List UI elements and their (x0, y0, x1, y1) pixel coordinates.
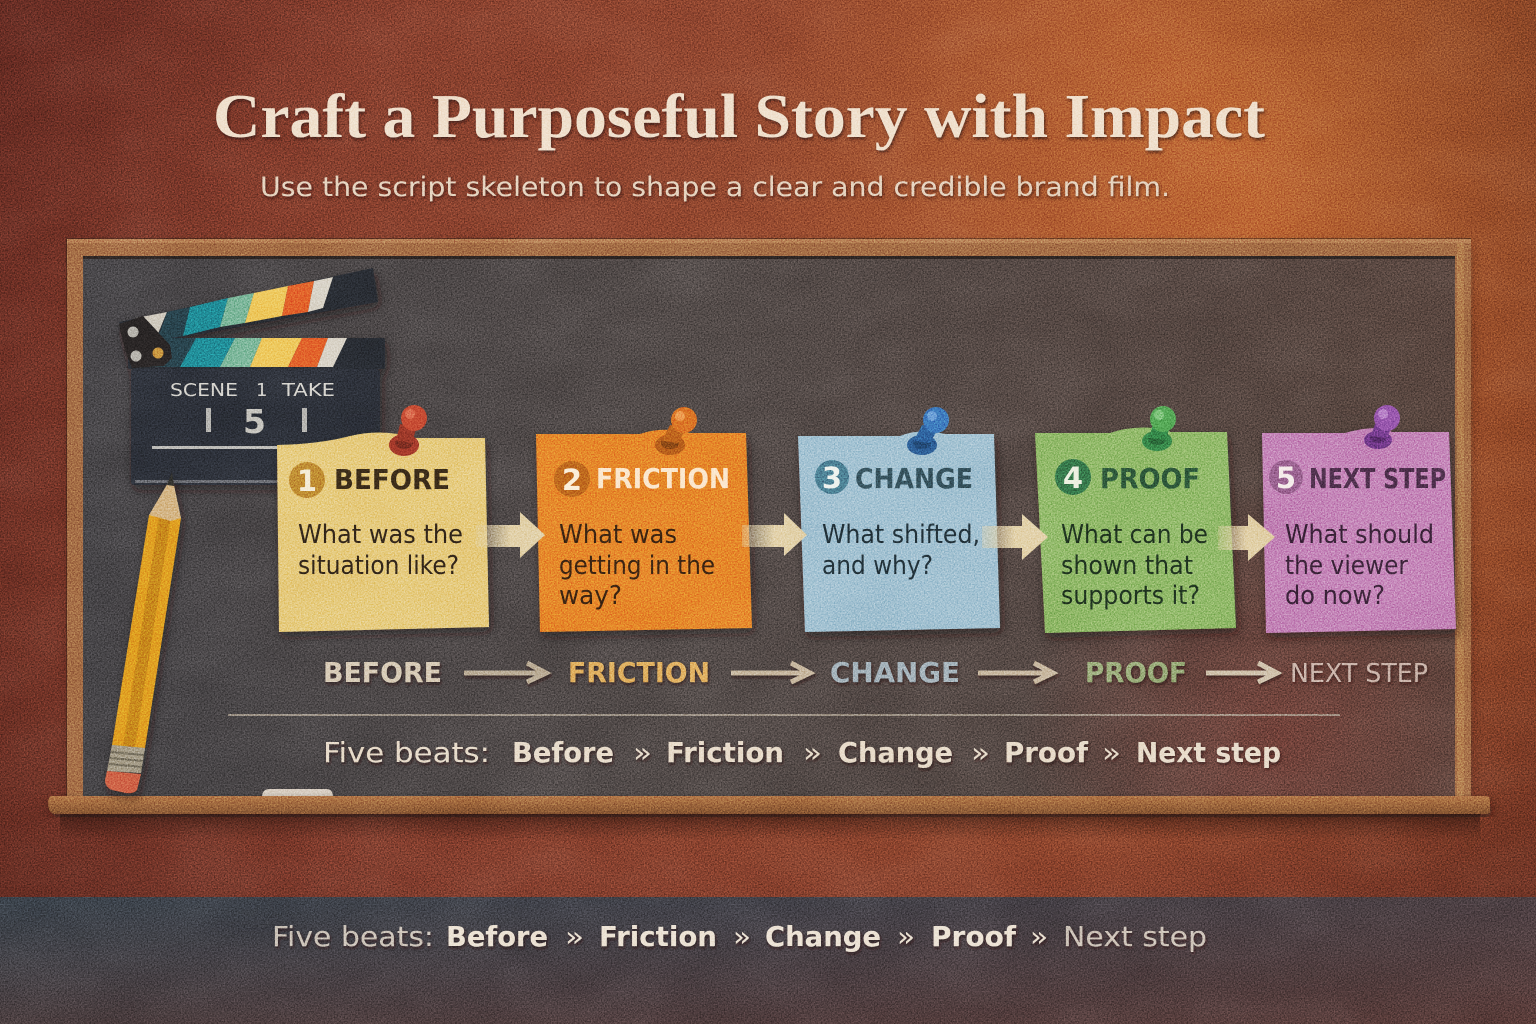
five beats line on board: Next step (1136, 736, 1281, 769)
badge 3: 3 (822, 461, 842, 495)
five beats line on board: » (1102, 736, 1121, 769)
clapper hinge (119, 316, 172, 368)
sticky note 2: friction (536, 407, 752, 632)
five beats line on board: Friction (666, 736, 784, 769)
clapperboard (119, 268, 385, 485)
flow arrow 3 (978, 663, 1053, 682)
label: proof: PROOF (1085, 656, 1187, 689)
footer five beats line: » (565, 920, 584, 953)
sticky note 5: next step (1262, 405, 1456, 633)
question 5 (1285, 520, 1434, 611)
footer five beats line: » (897, 920, 915, 953)
arrow: before to friction (476, 512, 545, 558)
badge 1 (289, 462, 325, 498)
beat labels row (323, 656, 1428, 689)
badge 5 (1269, 460, 1303, 495)
title: Craft a Purposeful Story with Impact (213, 83, 1265, 151)
sticky note 1: before (277, 405, 489, 632)
chalk ledge (48, 796, 1490, 814)
badge 2 (554, 461, 590, 497)
badge 1: 1 (297, 464, 317, 498)
question 4: supports it? (1061, 581, 1200, 611)
sticky note 4: proof (1035, 406, 1236, 633)
flow arrow 2 (731, 663, 810, 682)
question 2: way? (559, 581, 622, 611)
footer five beats line: » (1030, 920, 1048, 953)
clapper body (131, 369, 380, 485)
badge 4: 4 (1063, 461, 1083, 495)
footer five beats line: Before (446, 920, 548, 953)
badge 5: 5 (1276, 461, 1296, 495)
sticky note 3: change (798, 407, 1000, 632)
clapper top arm (119, 268, 378, 345)
arrow: friction to change (742, 513, 807, 556)
chalkboard (48, 238, 1490, 814)
clapper labels: SCENE (170, 380, 238, 401)
clapper lower arm (128, 338, 385, 369)
footer five beats line: Five beats: (272, 920, 434, 953)
chalk piece (262, 789, 333, 797)
question 3: What shifted, (822, 520, 980, 550)
arrow: proof to next step (1218, 514, 1275, 561)
clapper labels: 1 (256, 380, 267, 401)
footer five beats line: Proof (931, 920, 1017, 953)
five beats line on board: Five beats: (323, 736, 490, 769)
heading: next step: NEXT STEP (1309, 462, 1446, 495)
five beats line on board: » (633, 736, 652, 769)
flow arrow 1 (464, 663, 546, 682)
pin: green (1142, 406, 1176, 451)
label: friction: FRICTION (568, 656, 710, 689)
question 4: What can be (1061, 520, 1208, 550)
clapper labels: TAKE (281, 380, 335, 401)
footer five beats line: Change (765, 920, 881, 953)
pin: blue (907, 407, 949, 455)
subtitle: Use the script skeleton to shape a clear and credible brand film. (260, 172, 1170, 203)
pencil (105, 472, 181, 793)
heading: change: CHANGE (855, 462, 973, 495)
footer five beats line: » (733, 920, 751, 953)
five beats line on board: Change (838, 736, 953, 769)
question 4 (1061, 520, 1208, 611)
question 3 (822, 520, 980, 581)
question 2: getting in the (559, 551, 715, 581)
pin: orange (655, 407, 697, 455)
question 1 (298, 520, 463, 581)
question 3: and why? (822, 551, 933, 581)
heading: proof: PROOF (1100, 462, 1200, 495)
pin: red (389, 405, 427, 456)
clapper labels: 5 (243, 402, 266, 441)
footer band (0, 897, 1536, 1024)
arrow: change to proof (982, 514, 1048, 560)
flow arrow 4 (1206, 663, 1277, 682)
badge 2: 2 (562, 463, 582, 497)
footer five beats line (272, 920, 1207, 953)
label: before: BEFORE (323, 656, 442, 689)
five beats line on board: » (803, 736, 822, 769)
badge 4 (1055, 459, 1091, 495)
question 1: What was the (298, 520, 463, 550)
question 5: What should (1285, 520, 1434, 550)
label: next step: NEXT STEP (1290, 659, 1428, 689)
question 2: What was (559, 520, 677, 550)
label: change: CHANGE (830, 656, 960, 689)
pin: purple (1364, 405, 1400, 449)
question 1: situation like? (298, 551, 459, 581)
footer five beats line: Next step (1063, 920, 1207, 953)
five beats line on board: » (971, 736, 990, 769)
five beats line on board: Before (512, 736, 614, 769)
heading: friction: FRICTION (596, 462, 730, 495)
five beats line on board: Proof (1004, 736, 1089, 769)
question 5: the viewer (1285, 551, 1408, 581)
badge 3 (815, 460, 849, 495)
heading: before: BEFORE (334, 463, 450, 496)
footer five beats line: Friction (599, 920, 717, 953)
question 5: do now? (1285, 581, 1385, 611)
question 2 (559, 520, 715, 611)
question 4: shown that (1061, 551, 1193, 581)
clapper labels (152, 380, 335, 449)
five beats line on board (323, 736, 1281, 769)
